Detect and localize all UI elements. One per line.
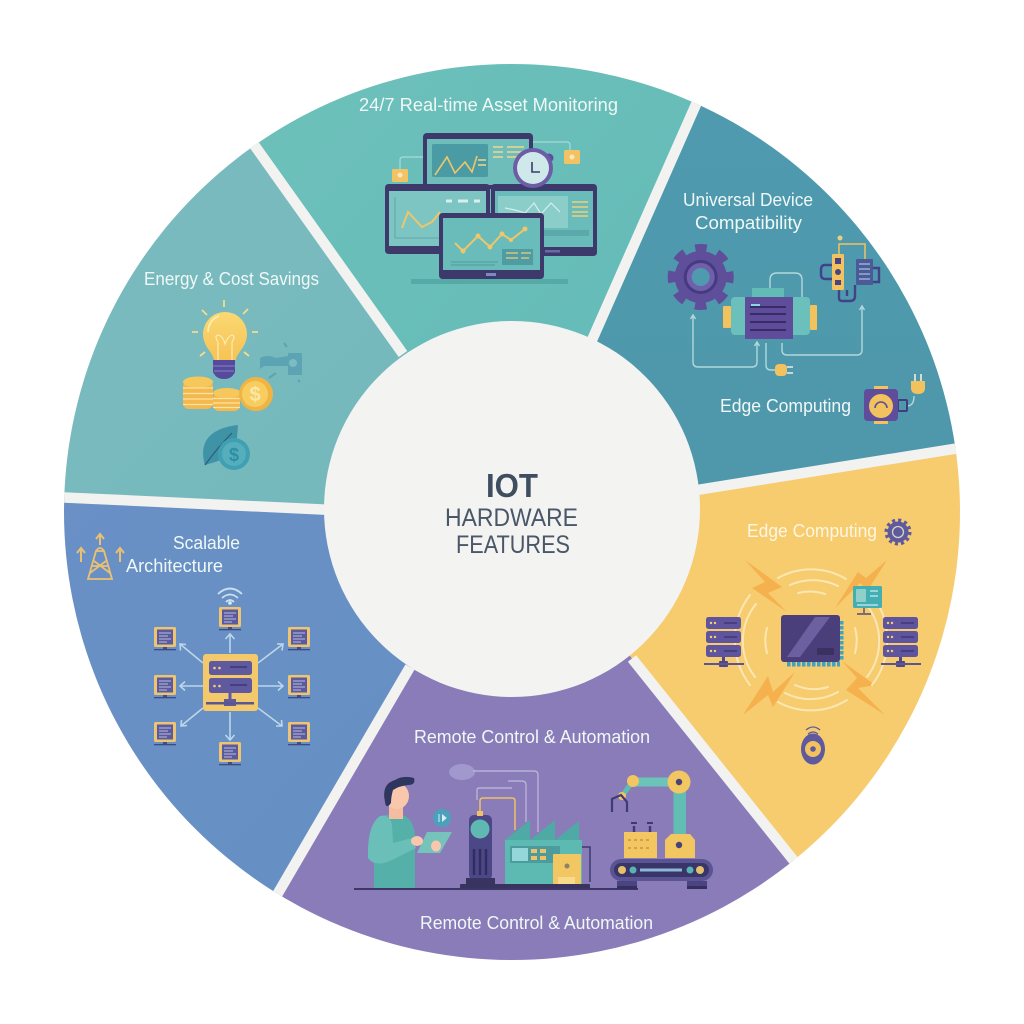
central hub (324, 321, 700, 697)
panel: 24/7 monitoring (359, 95, 618, 284)
icon: central server (203, 654, 258, 711)
icon: server right (881, 617, 921, 667)
segment background: real-time monitoring (254, 64, 696, 355)
icon: faded tool (260, 343, 302, 382)
segment background: device compatibility (597, 104, 956, 484)
icon: technician (368, 777, 452, 888)
icon: coin stacks: $ (249, 384, 261, 406)
segment background: edge computing (630, 449, 960, 860)
icon: leaf with coin (203, 425, 250, 470)
icon: gear (673, 249, 729, 305)
heading: remote control lower: Remote Control & Automation (420, 913, 653, 933)
segment background: energy savings (64, 146, 404, 504)
heading: remote control upper: Remote Control & Automation (414, 727, 650, 747)
icon: control wiring (449, 764, 538, 832)
heading: energy: Energy & Cost Savings (144, 269, 319, 289)
icon: robotic arm (610, 770, 713, 889)
icon: small display (853, 586, 882, 614)
heading: scalable: Scalable (173, 533, 240, 553)
icon: leaf with coin: $ (229, 445, 239, 465)
heading: monitoring: 24/7 Real-time Asset Monitoring (359, 95, 618, 115)
icon: network arrows (180, 634, 283, 740)
panel: edge computing (704, 520, 921, 764)
hub subtitle line two: FEATURES (456, 531, 570, 559)
icon: wireless sensor (801, 727, 825, 764)
segment background: remote control (278, 656, 794, 960)
panel: energy and cost savings (144, 269, 319, 470)
heading: compatibility: Compatibility (695, 213, 802, 233)
icon: edge nodes (154, 607, 310, 765)
icon: central adapter (723, 288, 817, 339)
icon: tower with arrows (77, 534, 124, 579)
panel: universal device compatibility (673, 190, 925, 424)
icon: gauge module (864, 374, 925, 424)
heading: edge computing (yellow): Edge Computing (747, 521, 877, 541)
icon: coin stacks (183, 376, 273, 411)
segment background: scalable architecture (64, 498, 410, 894)
heading: universal device: Universal Device (683, 190, 813, 210)
icon: wifi (218, 588, 242, 605)
panel: scalable architecture (77, 533, 310, 765)
infographic wheel (64, 64, 960, 960)
icon: control tower (466, 811, 495, 884)
icon: edge processor (781, 615, 841, 664)
heading: edge computing (teal): Edge Computing (720, 396, 851, 416)
icon: dashboard monitors (385, 133, 597, 284)
icon: connected device (821, 236, 879, 301)
hub subtitle line one: HARDWARE (445, 504, 578, 532)
icon: ground line (354, 888, 638, 890)
icon: light bulb (192, 300, 258, 379)
panel: remote control and automation (354, 727, 713, 933)
icon: connection lines (690, 273, 864, 370)
icon: stopwatch (513, 148, 554, 188)
wheel segments (64, 64, 960, 960)
icon: plug (775, 364, 793, 376)
icon: server left (704, 617, 744, 667)
heading: architecture: Architecture (126, 556, 223, 576)
icon: signal waves (735, 569, 887, 710)
hub title: IOT: IOT (486, 467, 538, 504)
icon: factory (460, 820, 590, 889)
icon: gear small (886, 520, 910, 544)
icon: lightning bolts (743, 560, 887, 715)
